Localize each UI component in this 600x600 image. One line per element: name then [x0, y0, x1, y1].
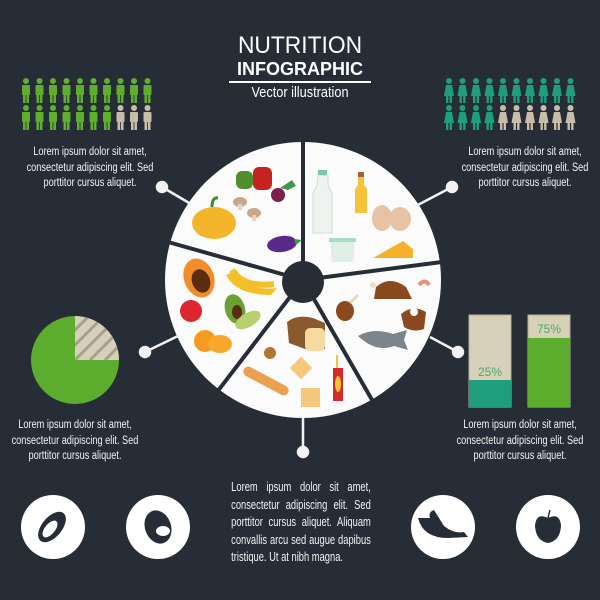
bread and cereals	[242, 317, 343, 407]
text: top left	[27, 146, 153, 189]
fruits	[178, 254, 277, 353]
icon: papaya	[21, 495, 85, 559]
text: bottom center: tristique. Ut at nibh magna.	[231, 549, 343, 564]
icon: apple	[516, 495, 580, 559]
icon: bananas	[411, 495, 475, 559]
text: bottom center: porttitor cursus aliquet. Aliquam	[231, 514, 371, 529]
dairy	[313, 170, 413, 262]
text: bottom center	[231, 479, 371, 564]
text: bottom right	[457, 419, 583, 462]
people: men icon array	[22, 78, 152, 130]
bar chart: 75%	[537, 322, 561, 336]
text: bottom center: convallis arcu sed augue dapibus	[231, 532, 371, 546]
text: top right: Lorem ipsum dolor sit amet,	[468, 146, 582, 158]
text: top right: consectetur adipiscing elit. Sed	[462, 162, 588, 174]
text: bottom center: consectetur adipiscing elit. Sed	[231, 496, 371, 512]
text: bottom left: consectetur adipiscing elit. Sed	[12, 434, 138, 446]
pie chart	[31, 316, 119, 404]
bar chart: 25%	[478, 365, 502, 379]
title: INFOGRAPHIC	[237, 59, 363, 79]
connectors	[140, 182, 463, 457]
text: bottom right: Lorem ipsum dolor sit amet,	[463, 419, 577, 431]
text: top left: consectetur adipiscing elit. Sed	[27, 162, 153, 174]
text: bottom center: Lorem ipsum dolor sit amet,	[231, 479, 371, 494]
title	[229, 32, 371, 101]
text: bottom left: porttitor cursus aliquet.	[28, 450, 122, 462]
title: Vector illustration	[251, 84, 349, 101]
vegetables	[192, 167, 302, 254]
text: top left: Lorem ipsum dolor sit amet,	[33, 146, 147, 158]
meat and fish	[336, 281, 429, 350]
text: top left: porttitor cursus aliquet.	[43, 177, 137, 189]
icon: avocado	[126, 495, 190, 559]
text: bottom right: porttitor cursus aliquet.	[473, 450, 567, 462]
title: NUTRITION	[238, 32, 362, 59]
people: women icon array	[444, 78, 576, 130]
text: bottom left	[12, 419, 138, 462]
food wheel	[165, 140, 442, 418]
text: top right: porttitor cursus aliquet.	[478, 177, 572, 189]
text: bottom right: consectetur adipiscing elit. Sed	[457, 434, 583, 446]
text: top right	[462, 146, 588, 189]
text: bottom left: Lorem ipsum dolor sit amet,	[18, 419, 132, 431]
bar chart	[469, 315, 570, 407]
